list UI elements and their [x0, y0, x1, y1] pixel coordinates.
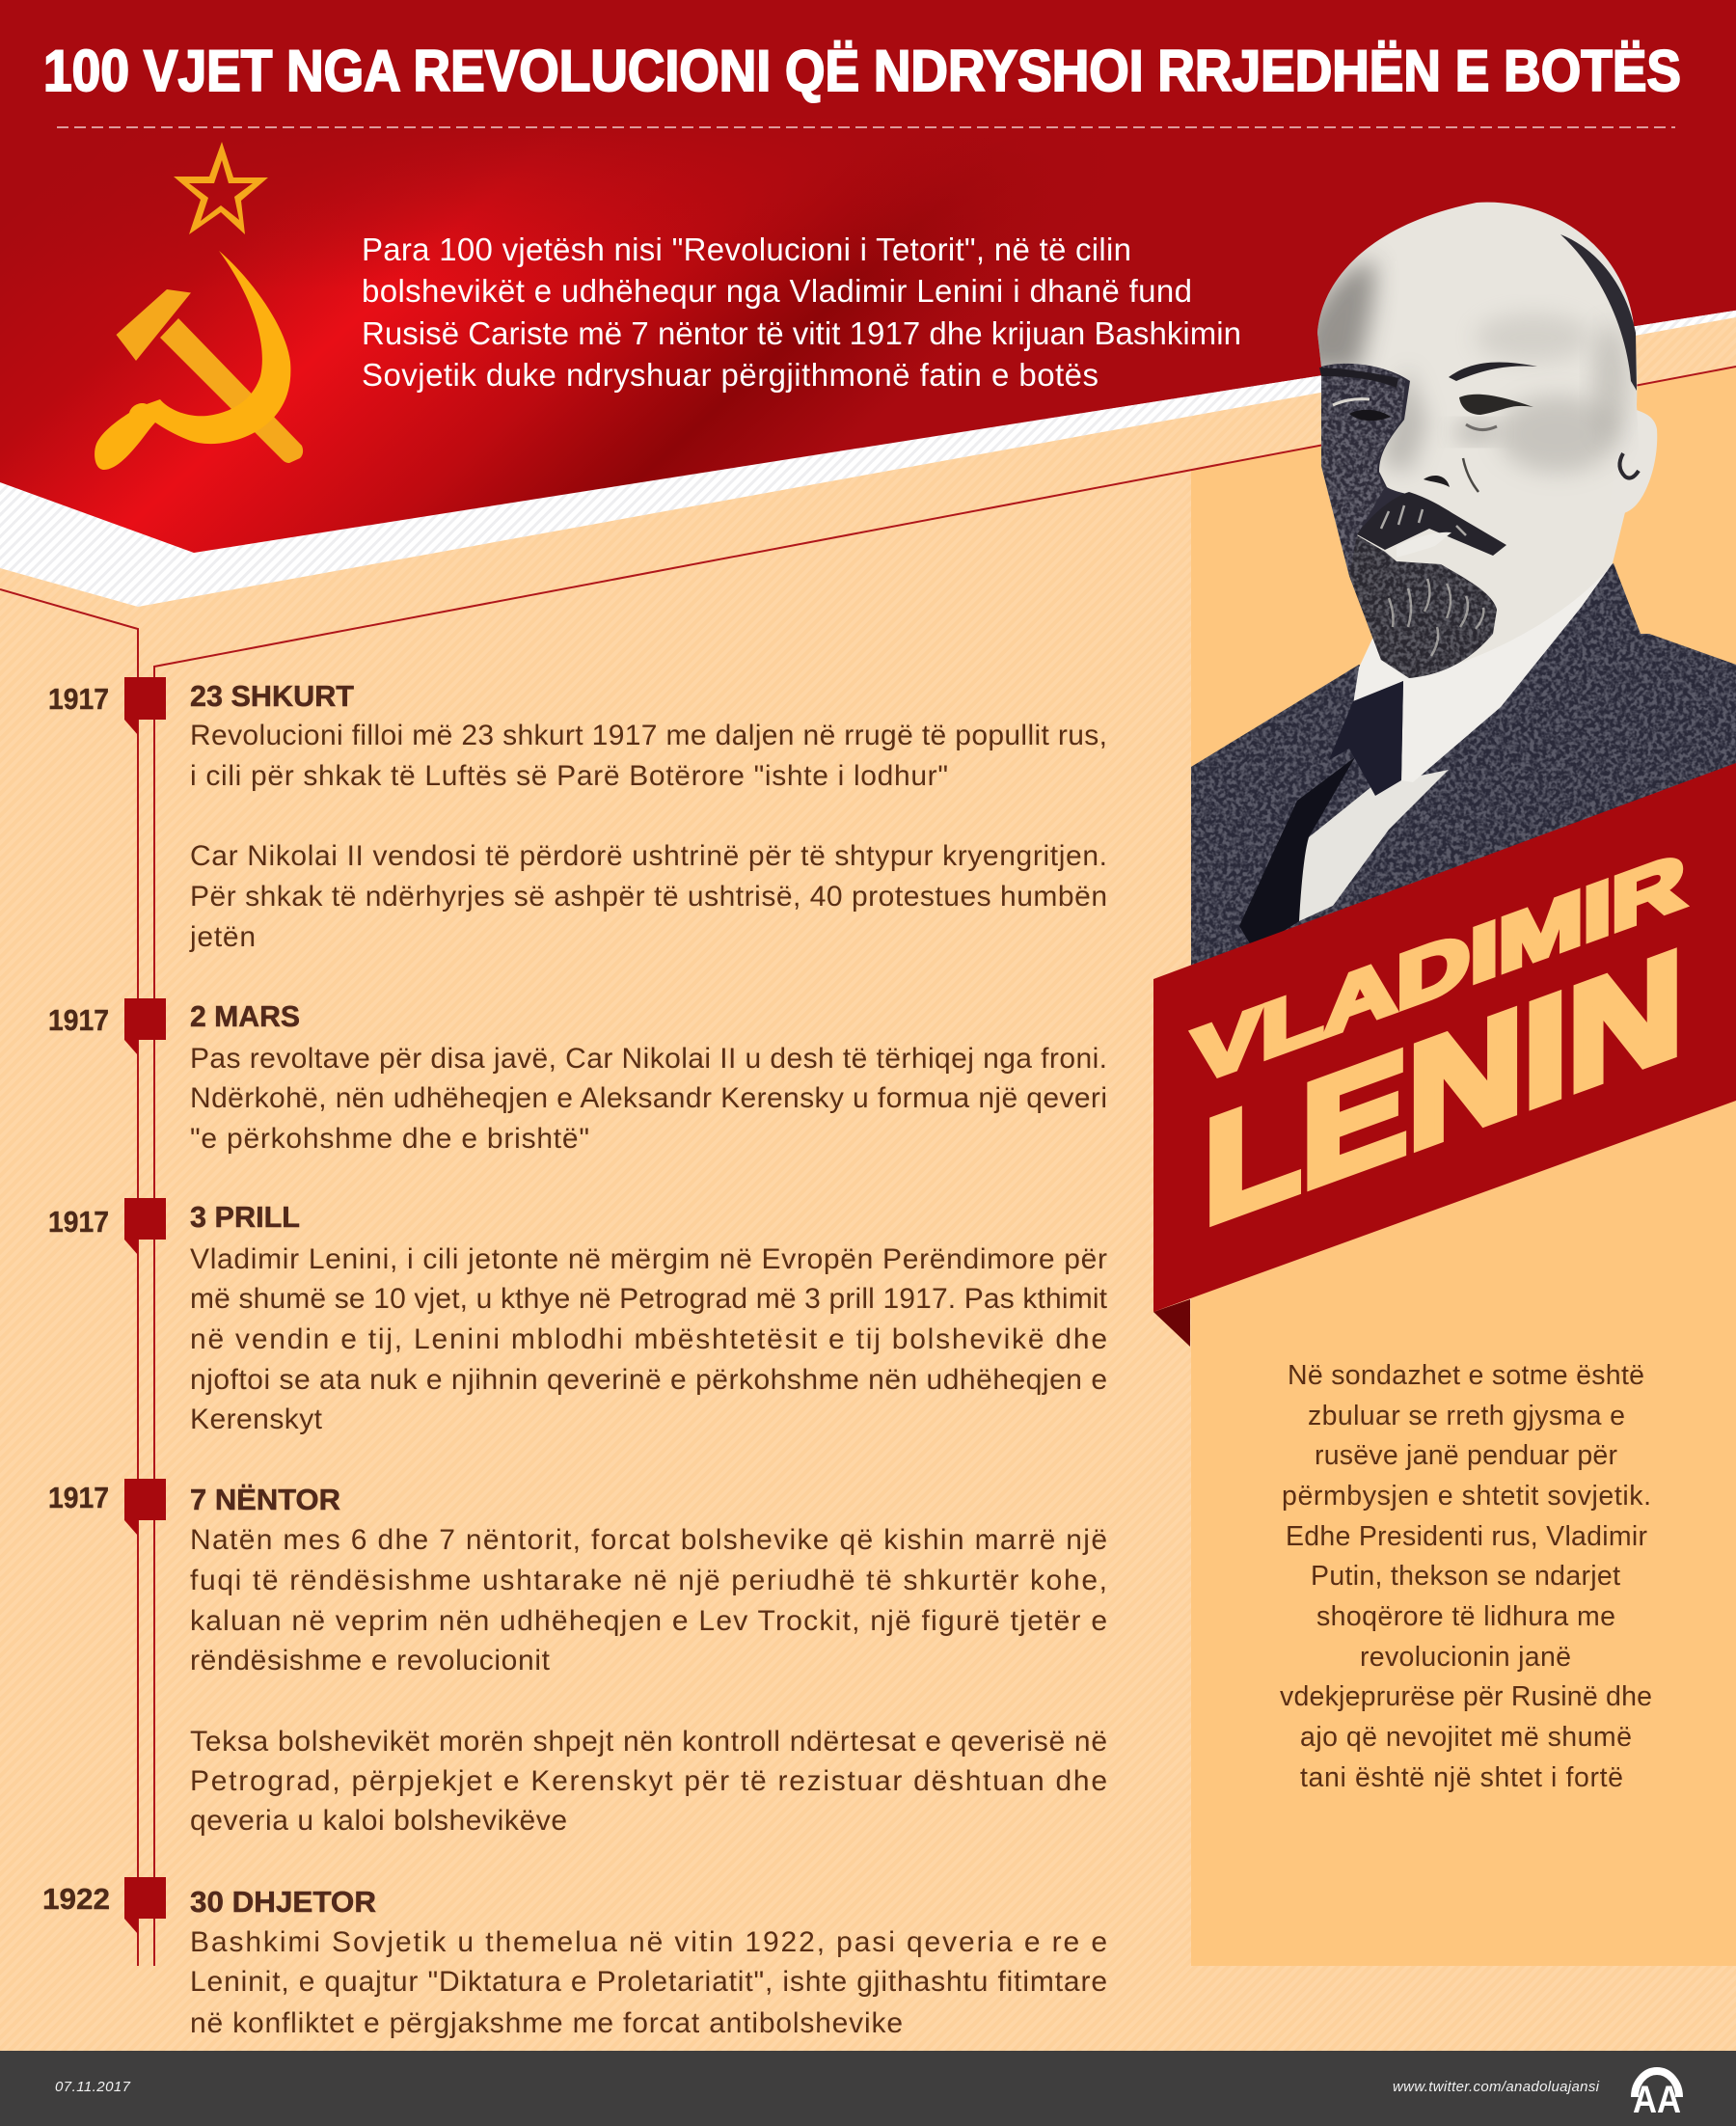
timeline entry: 23 shkurt: jetën	[189, 921, 256, 953]
timeline entry: 3 prill: më shumë se 10 vjet, u kthye në Petrograd më 3 prill 1917. Pas kthimit	[190, 1283, 1108, 1315]
timeline entry: 7 nentor: Teksa bolshevikët morën shpejt nën kontroll ndërtesat e qeverisë në	[190, 1726, 1107, 1758]
dark jacket lapel fold	[1239, 757, 1355, 950]
white band under flag	[0, 307, 1736, 607]
heading: 30 DHJETOR	[190, 1885, 376, 1919]
timeline entry: 23 shkurt: Car Nikolai II vendosi të përdorë ushtrinë për të shtypur kryengritjen.	[190, 840, 1107, 872]
intro text: Sovjetik duke ndryshuar përgjithmonë fatin e botës	[362, 357, 1099, 393]
intro text: Rusisë Cariste më 7 nëntor të vitit 1917 dhe krijuan Bashkimin	[362, 315, 1241, 351]
banner fold	[1153, 1299, 1190, 1347]
year: 1917	[48, 1003, 109, 1037]
timeline entry: 7 nentor	[48, 1479, 1107, 1837]
timeline entry: 2 mars: "e përkohshme dhe e brishtë"	[190, 1123, 589, 1155]
side text block: përmbysjen e shtetit sovjetik.	[1282, 1481, 1651, 1512]
footer	[0, 2051, 1736, 2126]
timeline entry: 2 mars	[48, 998, 1107, 1155]
portrait of Lenin	[1191, 203, 1736, 974]
marker	[124, 998, 166, 1055]
shirt front	[1299, 770, 1449, 921]
body: Natën mes 6 dhe 7 nëntorit, forcat bolshevike që kishin marrë një	[190, 1524, 1107, 1556]
timeline entry: 30 dhjetor	[42, 1877, 1107, 2039]
right eyebrow	[1449, 363, 1537, 381]
body: Vladimir Lenini, i cili jetonte në mërgim në Evropën Perëndimore për	[190, 1243, 1107, 1275]
banner name: first: VLADIMIR	[1193, 837, 1685, 1101]
timeline entry: 30 dhjetor: në konfliktet e përgjakshme me forcat antibolshevike	[190, 2007, 903, 2039]
timeline entry: 3 prill: në vendin e tij, Lenini mblodhi mbështetësit e tij bolshevikë dhe	[190, 1323, 1107, 1355]
side text block: Në sondazhet e sotme është	[1288, 1360, 1644, 1391]
marker	[124, 677, 166, 735]
side text block: vdekjeprurëse për Rusinë dhe	[1280, 1681, 1652, 1712]
side text block: revolucionin janë	[1360, 1642, 1571, 1673]
left eyebrow	[1319, 368, 1398, 388]
timeline frame lines	[0, 367, 1736, 1966]
hair	[1560, 234, 1637, 391]
footer bar	[0, 2051, 1736, 2126]
heading: 7 NËNTOR	[190, 1483, 340, 1516]
side text block: zbuluar se rreth gjysma e	[1308, 1401, 1625, 1431]
icon: agency logo: AA	[1633, 2079, 1681, 2121]
marker	[124, 1479, 166, 1536]
nose	[1424, 476, 1450, 487]
timeline entry: 3 prill: Kerenskyt	[190, 1404, 323, 1435]
marker	[124, 1877, 166, 1934]
side text block: Putin, thekson se ndarjet	[1311, 1561, 1620, 1592]
year: 1922	[42, 1882, 110, 1916]
side text block: rusëve janë penduar për	[1315, 1440, 1618, 1471]
beard	[1349, 535, 1497, 678]
body: Pas revoltave për disa javë, Car Nikolai II u desh të tërhiqej nga froni.	[190, 1043, 1107, 1075]
lips	[1439, 532, 1451, 536]
timeline entry: 23 shkurt	[48, 677, 1107, 953]
moustache	[1357, 492, 1506, 556]
heading: 23 SHKURT	[190, 679, 354, 713]
heading: 2 MARS	[190, 999, 300, 1033]
timeline entry: 7 nentor: Petrograd, përpjekjet e Kerenskyt për të rezistuar dështuan dhe	[190, 1765, 1107, 1797]
body: Revolucioni filloi më 23 shkurt 1917 me daljen në rrugë të popullit rus,	[190, 720, 1107, 751]
date: 07.11.2017	[55, 2079, 131, 2095]
timeline entry: 23 shkurt: i cili për shkak të Luftës së Parë Botërore "ishte i lodhur"	[190, 760, 948, 792]
left eye	[1349, 410, 1391, 421]
heading: 3 PRILL	[190, 1200, 300, 1234]
timeline entry: 7 nentor: fuqi të rëndësishme ushtarake në një periudhë të shkurtër kohe,	[190, 1565, 1107, 1596]
side text block: ajo që nevojitet më shumë	[1300, 1722, 1632, 1753]
soft face shading	[1302, 260, 1628, 473]
timeline entry: 7 nentor: kaluan në veprim nën udhëheqjen e Lev Trockit, një figurë tjetër e	[190, 1605, 1107, 1637]
timeline entry: 2 mars: Ndërkohë, nën udhëheqjen e Aleksandr Kerensky u formua një qeveri	[190, 1082, 1107, 1114]
panel: right side background	[1191, 367, 1736, 1966]
body: Bashkimi Sovjetik u themelua në vitin 1922, pasi qeveria e re e	[190, 1926, 1107, 1958]
necktie	[1329, 681, 1403, 796]
red flag header	[0, 0, 1736, 553]
timeline entry: 7 nentor: rëndësishme e revolucionit	[190, 1645, 551, 1676]
banner: Vladimir Lenin	[1153, 763, 1736, 1347]
twitter url: www.twitter.com/anadoluajansi	[1393, 2079, 1600, 2095]
icon: sickle	[95, 251, 290, 470]
year: 1917	[48, 1481, 109, 1514]
side text block: Edhe Presidenti rus, Vladimir	[1286, 1521, 1647, 1552]
year: 1917	[48, 682, 109, 716]
head	[1317, 203, 1640, 678]
white collar	[1353, 563, 1613, 782]
ear	[1625, 410, 1657, 513]
timeline entry: 3 prill: njoftoi se ata nuk e njihnin qeverinë e përkohshme nën udhëheqjen e	[190, 1364, 1107, 1396]
year: 1917	[48, 1205, 109, 1239]
banner ribbon	[1153, 763, 1736, 1312]
right eye	[1459, 395, 1533, 415]
title divider	[57, 126, 1675, 128]
side text block	[1280, 1360, 1652, 1793]
side text block: shoqërore të lidhura me	[1316, 1601, 1615, 1632]
timeline entry: 7 nentor: qeveria u kaloi bolshevikëve	[190, 1805, 567, 1837]
intro text	[362, 232, 1241, 393]
banner name: last: LENIN	[1204, 919, 1683, 1257]
timeline entry: 23 shkurt: Për shkak të ndërhyrjes së ashpër të ushtrisë, 40 protestues humbën	[190, 881, 1107, 913]
marker	[124, 1198, 166, 1255]
icon: hammer	[116, 289, 303, 463]
timeline entry: 3 prill	[48, 1198, 1108, 1435]
intro text: Para 100 vjetësh nisi "Revolucioni i Tetorit", në të cilin	[362, 232, 1131, 267]
intro text: bolshevikët e udhëhequr nga Vladimir Lenini i dhanë fund	[362, 273, 1192, 309]
shadow side of face	[1321, 363, 1410, 660]
icon: star, hammer and sickle	[95, 142, 303, 470]
side text block: tani është një shtet i fortë	[1300, 1762, 1623, 1793]
icon: star	[174, 142, 268, 234]
jacket	[1191, 563, 1736, 974]
timeline entry: 30 dhjetor: Leninit, e quajtur "Diktatura e Proletariatit", ishte gjithashtu fitimtare	[190, 1966, 1107, 1998]
